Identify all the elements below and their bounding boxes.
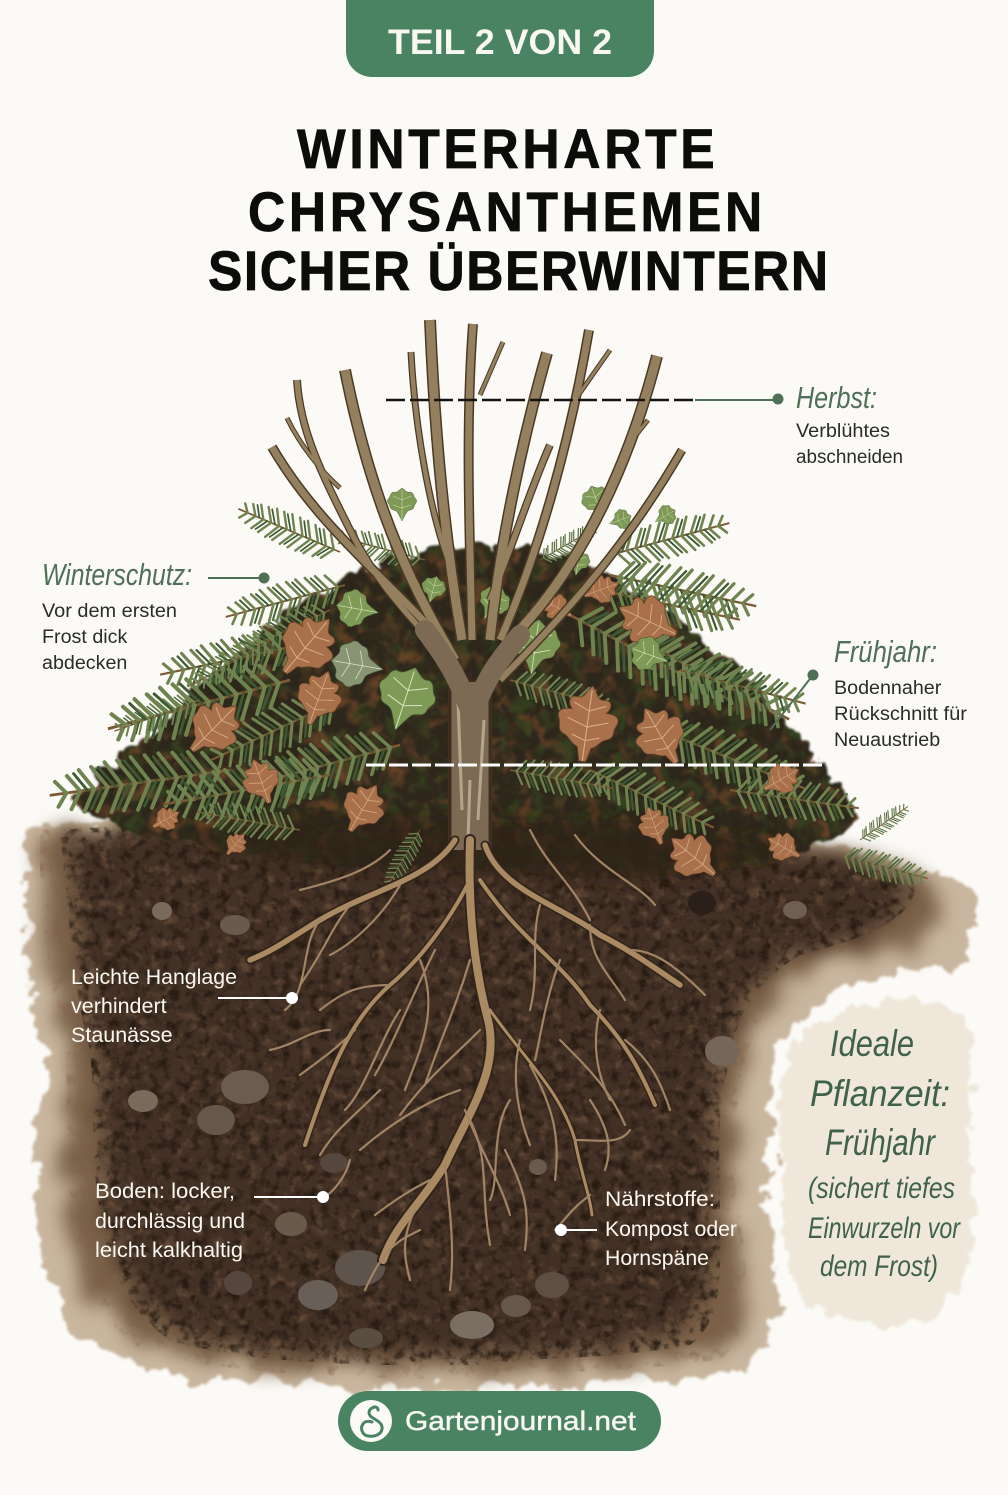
label: slope: Leichte Hanglage: [71, 965, 237, 989]
soil mid wash: [45, 823, 940, 1373]
brown leaves: [147, 570, 807, 891]
label: winter protection: abdecken: [42, 652, 127, 674]
soil cross-section: [27, 820, 974, 1389]
label: autumn: [796, 380, 903, 468]
label: autumn: abschneiden: [796, 446, 903, 468]
label: soil: [95, 1179, 329, 1262]
label: spring: Rückschnitt für: [834, 703, 967, 725]
callout: planting time: Einwurzeln vor: [808, 1212, 961, 1245]
callout: planting time: [808, 1023, 961, 1283]
label: autumn: Herbst:: [796, 380, 877, 415]
title: [208, 118, 828, 302]
soil texture dark: [60, 826, 915, 1365]
label: nutrients: [555, 1187, 737, 1270]
mound lower shade: [190, 821, 790, 879]
trunk: [448, 680, 492, 850]
title: WINTERHARTE: [297, 118, 715, 180]
soil texture light: [40, 824, 930, 1378]
soil dark core: [70, 830, 905, 1355]
label: nutrients: Hornspäne: [605, 1246, 709, 1270]
label: spring: Bodennaher: [834, 677, 942, 699]
fine roots: [270, 830, 705, 1290]
tab: part label: TEIL 2 VON 2: [388, 23, 612, 62]
icon: sprout logo: [350, 1400, 392, 1442]
root system: [250, 830, 705, 1290]
roots outline: [250, 840, 680, 1260]
label: winter protection: [42, 557, 270, 674]
cream wash panel: [779, 999, 974, 1325]
label: autumn: Verblühtes: [796, 420, 890, 442]
green leaves: [327, 481, 680, 739]
tab: part label: [346, 0, 654, 77]
title: SICHER ÜBERWINTERN: [208, 240, 828, 302]
footer logo pill: [338, 1391, 661, 1451]
title: CHRYSANTHEMEN: [248, 181, 762, 243]
callout: planting time: Pflanzeit:: [810, 1073, 950, 1114]
label: winter protection: Vor dem ersten: [42, 600, 177, 622]
label: winter protection: Winterschutz:: [42, 557, 192, 592]
cut line: spring: [366, 670, 823, 765]
label: nutrients: Nährstoffe:: [605, 1187, 715, 1211]
label: nutrients: Kompost oder: [605, 1217, 737, 1241]
stems fill: [272, 320, 682, 690]
callout: planting time: dem Frost): [820, 1250, 938, 1283]
callout: planting time: Ideale: [830, 1023, 914, 1064]
label: spring: Frühjahr:: [834, 634, 937, 669]
stems outline: [272, 320, 682, 690]
label: soil: durchlässig und: [95, 1209, 245, 1233]
label: winter protection: Frost dick: [42, 626, 127, 648]
label: soil: Boden: locker,: [95, 1179, 235, 1203]
label: slope: Staunässe: [71, 1023, 173, 1047]
label: spring: Neuaustrieb: [834, 729, 940, 751]
soil outer wash: [27, 820, 974, 1389]
mulch mound: [46, 481, 931, 891]
plant stems: [272, 320, 682, 850]
label: spring: [834, 634, 967, 751]
label: slope: verhindert: [71, 994, 167, 1018]
fir branches: [46, 494, 931, 891]
label: soil: leicht kalkhaltig: [95, 1238, 243, 1262]
label: slope: [71, 965, 298, 1047]
cut line: autumn: [386, 394, 784, 404]
mound base: [70, 545, 862, 874]
roots fill: [250, 840, 680, 1260]
footer logo pill: Gartenjournal.net: [405, 1406, 637, 1436]
stones: [128, 891, 807, 1348]
callout: planting time: (sichert tiefes: [808, 1172, 955, 1205]
callout: planting time: Frühjahr: [825, 1122, 936, 1163]
